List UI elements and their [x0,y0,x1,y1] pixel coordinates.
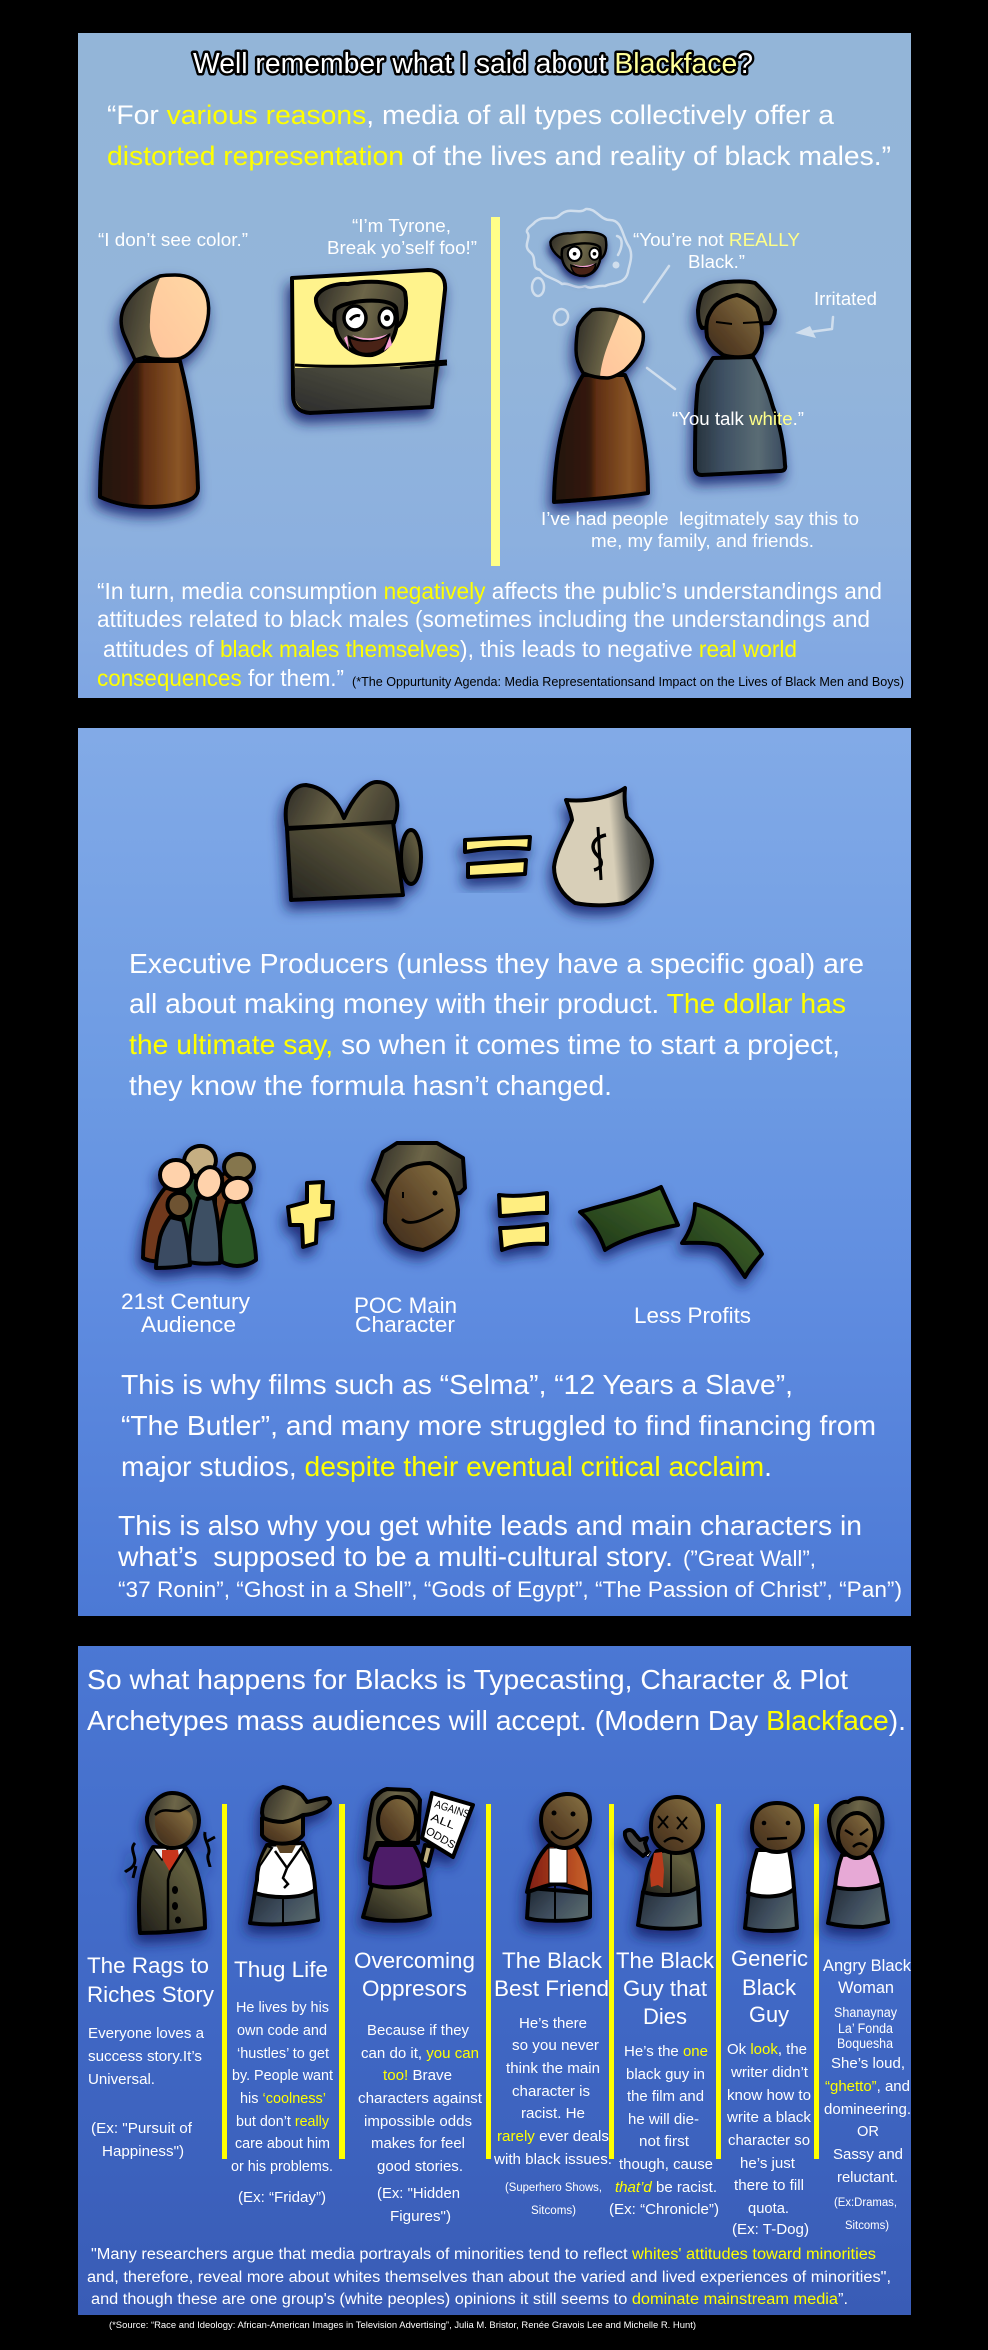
column: generic black guy: character so [728,2132,810,2149]
column: thug life: own code and [237,2022,327,2039]
icon: equals sign [465,837,530,877]
column: overcoming oppressors: Because if they [367,2022,469,2039]
caption: not really black [633,230,800,272]
column: rags to riches: Everyone loves a [88,2025,205,2042]
text block: executive producers: the ultimate say, so when it comes time to start a project, [129,1029,840,1060]
caption: Tyrone: “I’m Tyrone, [352,216,451,236]
speech line [644,266,669,302]
text block: media consumption: attitudes of black males themselves), this leads to negative real world [103,636,797,662]
column: black guy that dies: (Ex: “Chronicle”) [609,2201,719,2218]
text block: researchers quote: and, therefore, reveal more about whites themselves than about the varied and lived experiences of minorities", [87,2269,891,2286]
column: angry black woman: Sassy and [833,2146,903,2163]
text block: researchers quote: and though these are one group's (white peoples) opinions it still seems to dominate mainstream media ”. [91,2291,848,2308]
label: audience: 21st Century [121,1289,250,1314]
column: thug life: but don’t really [236,2113,329,2130]
text block: media consumption: “In turn, media consumption negatively affects the public’s understandings and [97,578,882,604]
quote: distorted representation: “For various reasons , media of all types collectively offer a [107,100,835,130]
text block: white leads: (”Great Wall”, [683,1546,816,1571]
column: black best friend: (Superhero Shows, [505,2182,602,2194]
column: overcoming oppressors [354,1948,483,2225]
character: best friend [527,1794,590,1921]
footnote: (*The Oppurtunity Agenda: Media Representationsand Impact on the Lives of Black Men and Boys) [352,674,904,689]
text block: films [121,1369,876,1482]
column title: Black [742,1975,797,2000]
column title: The Black [616,1948,715,1973]
column: overcoming oppressors: Figures") [390,2208,451,2225]
column: black best friend: He’s there [519,2015,587,2032]
column: angry black woman: She’s loud, [831,2055,905,2072]
column: thug life: or his problems. [231,2158,333,2175]
figure: irritated man [695,281,785,475]
column: angry black woman: La’ Fonda [838,2021,893,2036]
column: generic black guy: he’s just [740,2155,796,2172]
caption: not really black: “You’re not REALLY [633,230,800,250]
column: thug life: by. People want [232,2067,334,2084]
column title: Generic [731,1946,808,1971]
panel: archetypes [78,1646,912,2315]
column title: Angry Black [823,1957,912,1975]
character: angry black woman [828,1798,888,1927]
column: overcoming oppressors: (Ex: "Hidden [377,2185,460,2202]
text block: executive producers [129,948,864,1101]
text block: white leads: “37 Ronin”, “Ghost in a Shell”, “Gods of Egypt”, “The Passion of Christ”, “Pan”) [118,1577,902,1602]
text block: executive producers: they know the formula hasn’t changed. [129,1070,612,1101]
column: thug life: care about him [235,2135,330,2152]
column: black best friend: rarely ever deals [497,2128,609,2145]
column: generic black guy: there to fill [734,2177,804,2194]
figure: television with blackface character [292,270,447,413]
column: thug life [231,1957,334,2206]
column title [354,1948,475,2001]
column: rags to riches: (Ex: "Pursuit of [91,2120,193,2137]
character: generic black guy [745,1803,803,1931]
column title: Dies [643,2004,687,2029]
column: generic black guy: know how to [727,2087,811,2104]
figure: person with peach face [100,275,209,507]
sign text: ALL [429,1812,457,1832]
column: angry black woman: “ghetto”, and [825,2078,910,2095]
caption: Tyrone: Break yo’self foo!” [327,238,477,258]
caption: irritated: Irritated [814,289,877,309]
character: rags to riches [125,1793,215,1933]
icon: audience group [143,1141,256,1268]
character: black guy that dies [625,1797,703,1929]
text block: white leads [117,1510,902,1602]
column title [731,1946,808,2027]
column: black best friend: with black issues. [493,2151,612,2168]
column title: The Black [502,1948,603,1973]
panel: money [78,728,911,1616]
icon: torn dollar bill [580,1187,762,1277]
icon: small blackface head in thought [550,232,606,276]
column: angry black woman: Sitcoms) [845,2220,889,2232]
character: thug life [250,1787,330,1924]
text block: media consumption [97,578,882,691]
text block: executive producers: all about making money with their product. The dollar has [129,988,846,1019]
column title: Guy [749,2002,789,2027]
column: black guy that dies: He’s the one [624,2043,708,2060]
column: generic black guy: Ok look, the [727,2041,807,2058]
column: black guy that dies: black guy in [626,2066,705,2083]
column title: Woman [838,1979,894,1997]
column title [494,1948,609,2001]
sign text [424,1798,471,1852]
column: black best friend: think the main [506,2060,600,2077]
column title: Riches Story [87,1982,214,2007]
icon: POC main character head [373,1143,465,1250]
column: thug life: ‘hustles’ to get [237,2045,330,2062]
column: black best friend [493,1948,612,2217]
icon: movie camera [286,782,421,900]
column title: Guy that [623,1976,707,2001]
column: overcoming oppressors: can do it, you can [361,2045,479,2062]
text block: white leads: what’s supposed to be a multi-cultural story. [117,1541,673,1572]
column: generic black guy: quota. [748,2200,789,2217]
heading: typecasting: Archetypes mass audiences will accept. (Modern Day Blackface). [87,1705,906,1736]
column: angry black woman: Shanaynay [834,2005,897,2020]
column: black best friend: racist. He [521,2105,585,2122]
sign text: AGAINS [433,1798,471,1821]
column: overcoming oppressors: makes for feel [371,2135,465,2152]
text block: films: major studios, despite their eventual critical acclaim. [121,1451,772,1482]
column: generic black guy [726,1946,811,2238]
arrow: irritated [795,317,833,338]
column: rags to riches [87,1953,214,2160]
column: overcoming oppressors: good stories. [377,2158,463,2175]
caption: personal experience [541,509,859,551]
text block: researchers quote: "Many researchers argue that media portrayals of minorities tend to reflect whites' attitudes toward minorities [91,2246,876,2263]
column: overcoming oppressors: characters against [358,2090,483,2107]
source footnote: (*Source: “Race and Ideology: African-American Images in Television Advertising”, Julia M. Bristor, Renée Gravois Lee and Michelle R. Hunt) [109,2320,696,2331]
text block: media consumption: consequences for them.” [97,665,344,691]
title: Well remember what I said about Blackface? [193,48,753,80]
caption: Tyrone [327,216,477,258]
column title: Overcoming [354,1948,475,1973]
column: thug life: He lives by his [236,1999,329,2016]
column: black guy that dies: the film and [627,2088,704,2105]
icon: blackface head [316,282,406,355]
label: POC main character: POC Main [354,1293,457,1318]
column: angry black woman: (Ex:Dramas, [834,2197,897,2209]
column title [616,1948,715,2029]
column: rags to riches: Universal. [88,2071,155,2088]
figure: person with dark hair in profile [554,309,648,502]
text block: executive producers: Executive Producers (unless they have a specific goal) are [129,948,864,979]
column: rags to riches: Happiness") [102,2143,184,2160]
column title [87,1953,214,2007]
column: angry black woman: reluctant. [837,2169,898,2186]
text block: films: This is why films such as “Selma”, “12 Years a Slave”, [121,1369,793,1400]
heading: typecasting [87,1664,906,1736]
column: black guy that dies: not first [639,2133,690,2150]
column title [823,1957,912,1997]
column title: Thug Life [234,1957,328,1982]
column: rags to riches: success story.It’s [88,2048,202,2065]
icon: plus sign [288,1182,333,1247]
column: black guy that dies: he will die- [628,2111,699,2128]
column: generic black guy: writer didn’t [730,2064,809,2081]
caption: you talk white: “You talk white.” [672,409,804,429]
speech line [647,368,675,389]
column: angry black woman: domineering. [824,2101,911,2118]
column: generic black guy: (Ex: T-Dog) [732,2221,809,2238]
text block: films: “The Butler”, and many more struggled to find financing from [121,1410,876,1441]
column: angry black woman: OR [857,2123,879,2140]
column title: Best Friend [494,1976,609,2001]
quote: distorted representation: distorted representation of the lives and reality of black males.” [107,141,891,171]
text block: media consumption: attitudes related to black males (sometimes including the understandings and [97,606,870,632]
label: less profits: Less Profits [634,1303,751,1328]
column title: Oppresors [362,1976,467,2001]
icon: thought cloud [527,209,631,327]
column: black guy that dies [609,1948,719,2218]
column: black best friend: Sitcoms) [531,2205,576,2217]
column: angry black woman: Boquesha [837,2036,893,2051]
heading: typecasting: So what happens for Blacks is Typecasting, Character & Plot [87,1664,848,1695]
column: black guy that dies: that’d be racist. [615,2179,717,2196]
panel: blackface [78,33,911,698]
column dividers [222,1804,819,2159]
column: generic black guy: write a black [726,2109,811,2126]
column: black guy that dies: though, cause [619,2156,713,2173]
column: angry black woman [823,1957,912,2232]
column: thug life: (Ex: “Friday”) [238,2189,326,2206]
caption: personal experience: I’ve had people legitmately say this to [541,509,859,529]
character: overcoming oppressors [363,1789,473,1921]
caption: not really black: Black.” [688,252,745,272]
label: POC main character: Character [355,1312,455,1337]
column: thug life: his ‘coolness’ [240,2090,326,2107]
caption: personal experience: me, my family, and friends. [591,531,814,551]
icon: money bag [554,788,652,905]
divider: yellow bar [491,217,500,566]
label: audience: Audience [141,1312,236,1337]
column: overcoming oppressors: too! Brave [383,2067,452,2084]
column: black best friend: so you never [512,2037,599,2054]
icon: equals sign [499,1193,547,1250]
caption: I don't see color: “I don’t see color.” [98,230,248,250]
column title: The Rags to [87,1953,209,1978]
sign text: ODDS [424,1825,457,1852]
label: audience [121,1289,250,1337]
text block: researchers quote [87,2246,891,2308]
column: overcoming oppressors: impossible odds [364,2113,472,2130]
quote: distorted representation [107,100,891,171]
column: black best friend: character is [512,2083,590,2100]
text block: white leads: This is also why you get white leads and main characters in [118,1510,862,1541]
label: POC main character [354,1293,457,1337]
